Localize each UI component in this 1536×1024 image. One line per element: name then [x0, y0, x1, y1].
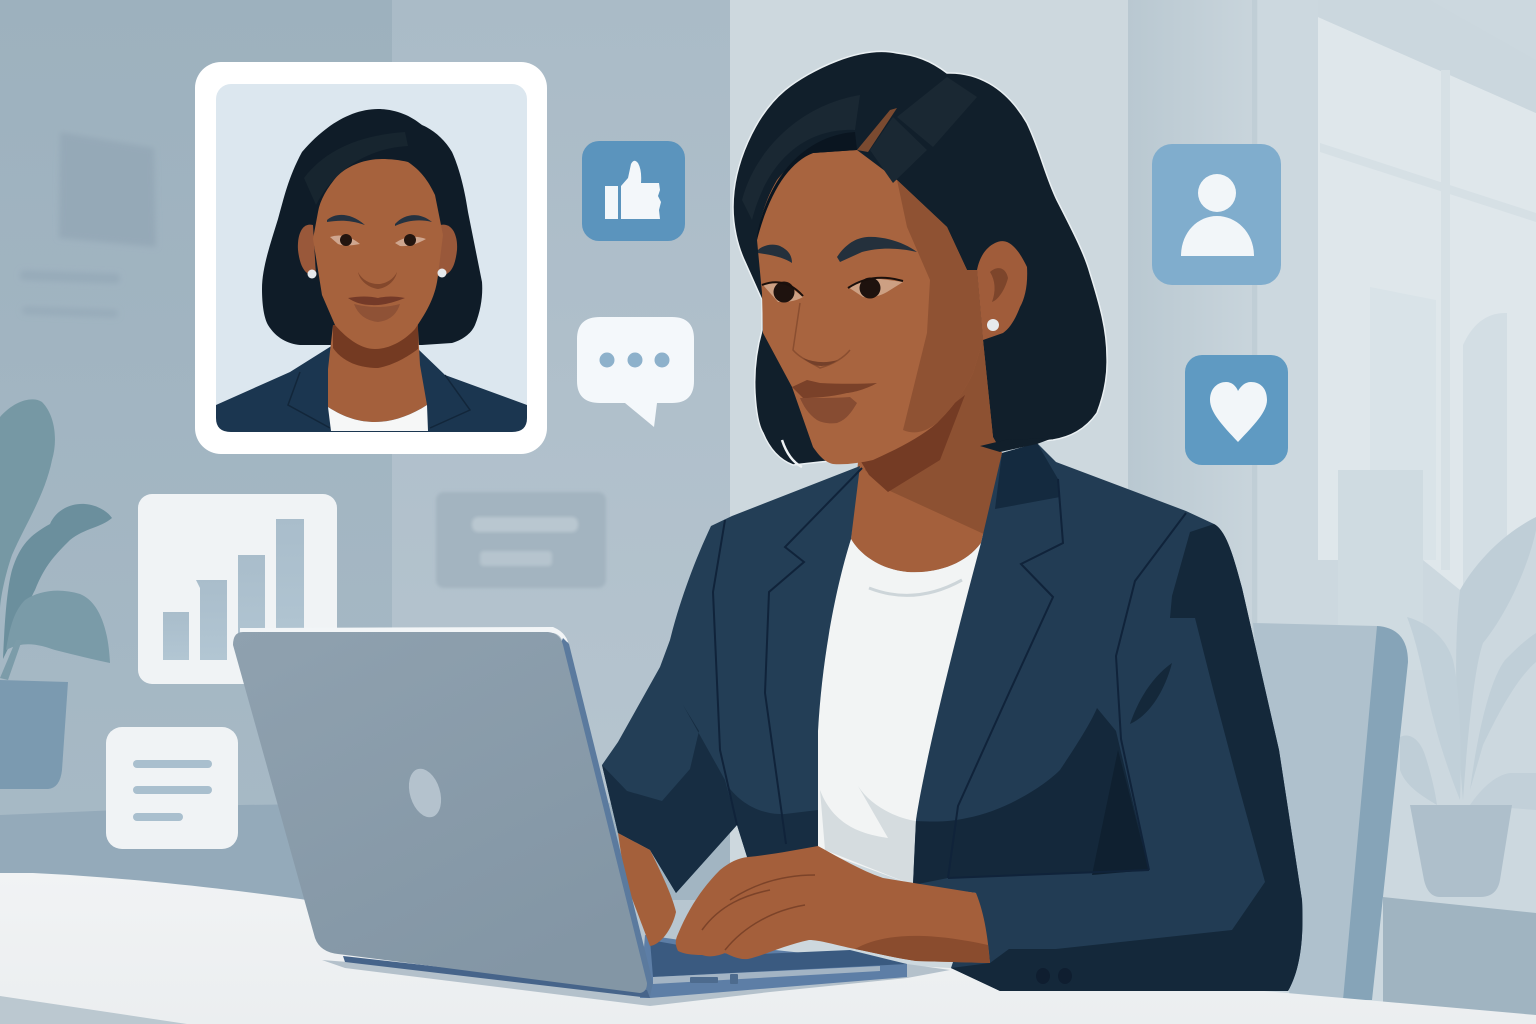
laptop: base and keyboard	[640, 922, 907, 998]
ear	[977, 241, 1027, 340]
face: side shadow	[897, 180, 983, 432]
earring	[987, 319, 999, 331]
laptop: hinge edge	[343, 956, 650, 998]
blazer: left panel	[602, 466, 860, 893]
blazer: right panel	[913, 443, 1302, 991]
blazer: right sleeve shadow	[951, 524, 1302, 991]
laptop: lid panel	[233, 632, 647, 993]
icon: text document card	[106, 727, 238, 849]
lips	[792, 380, 877, 423]
icon: heart	[1185, 355, 1288, 465]
shirt collar crease	[869, 580, 962, 595]
nose	[793, 303, 850, 368]
blazer: left arm shadow	[602, 705, 737, 893]
icon: chat bubble	[577, 317, 694, 427]
far hand behind laptop	[618, 833, 676, 946]
laptop: lid top highlight	[240, 627, 568, 642]
background: faded wall frame	[20, 132, 156, 318]
neck chin shadow	[860, 395, 965, 492]
laptop: logo	[403, 765, 447, 821]
hair: lower tip	[980, 438, 1053, 452]
hair: highlight bands	[742, 77, 977, 220]
eyebrows	[758, 237, 917, 263]
shirt	[818, 539, 981, 885]
blazer: cuff buttons	[1036, 968, 1072, 984]
plant: left	[0, 399, 112, 789]
icon: user profile	[1152, 144, 1281, 285]
face	[757, 150, 983, 464]
hair: inner hairline shadow	[757, 132, 857, 240]
icon: thumbs up	[582, 141, 685, 241]
desk	[0, 873, 1536, 1024]
hair: parting	[857, 108, 897, 152]
near hand on keyboard	[676, 846, 990, 963]
portrait: nose and lips	[348, 272, 405, 322]
portrait: shirt	[328, 405, 428, 431]
portrait: hair front highlight	[304, 132, 408, 205]
portrait: ears	[298, 225, 457, 276]
near hand finger lines	[702, 875, 815, 950]
blazer: collar	[995, 443, 1060, 509]
portrait: face	[313, 159, 443, 349]
plant: right	[1400, 517, 1536, 897]
icon: bar chart card	[138, 494, 337, 684]
blazer: right lower shadow	[913, 708, 1149, 885]
portrait: eyes and brows	[327, 215, 432, 246]
person	[602, 51, 1302, 991]
portrait: hair back	[262, 109, 482, 345]
portrait: earrings	[308, 268, 446, 278]
portrait: chin shadow	[333, 325, 418, 368]
laptop: lid	[233, 627, 653, 998]
neck shadow	[865, 340, 1002, 535]
portrait: neck	[328, 325, 427, 422]
hair: back	[733, 51, 1107, 465]
hair: lock highlight	[782, 440, 802, 467]
portrait: blazer	[216, 345, 527, 432]
laptop: lid side rim	[560, 638, 653, 996]
background chair	[1253, 623, 1408, 1000]
eyes	[762, 278, 903, 302]
shirt shadow	[820, 786, 916, 885]
portrait: blazer lapels	[288, 372, 470, 428]
blazer: seams and lapels	[713, 468, 1186, 878]
background: faded wall sign	[436, 492, 606, 588]
profile photo card	[195, 62, 547, 454]
neck	[851, 340, 1002, 572]
blazer: left lower shadow	[727, 785, 818, 860]
near hand shading	[855, 936, 990, 963]
